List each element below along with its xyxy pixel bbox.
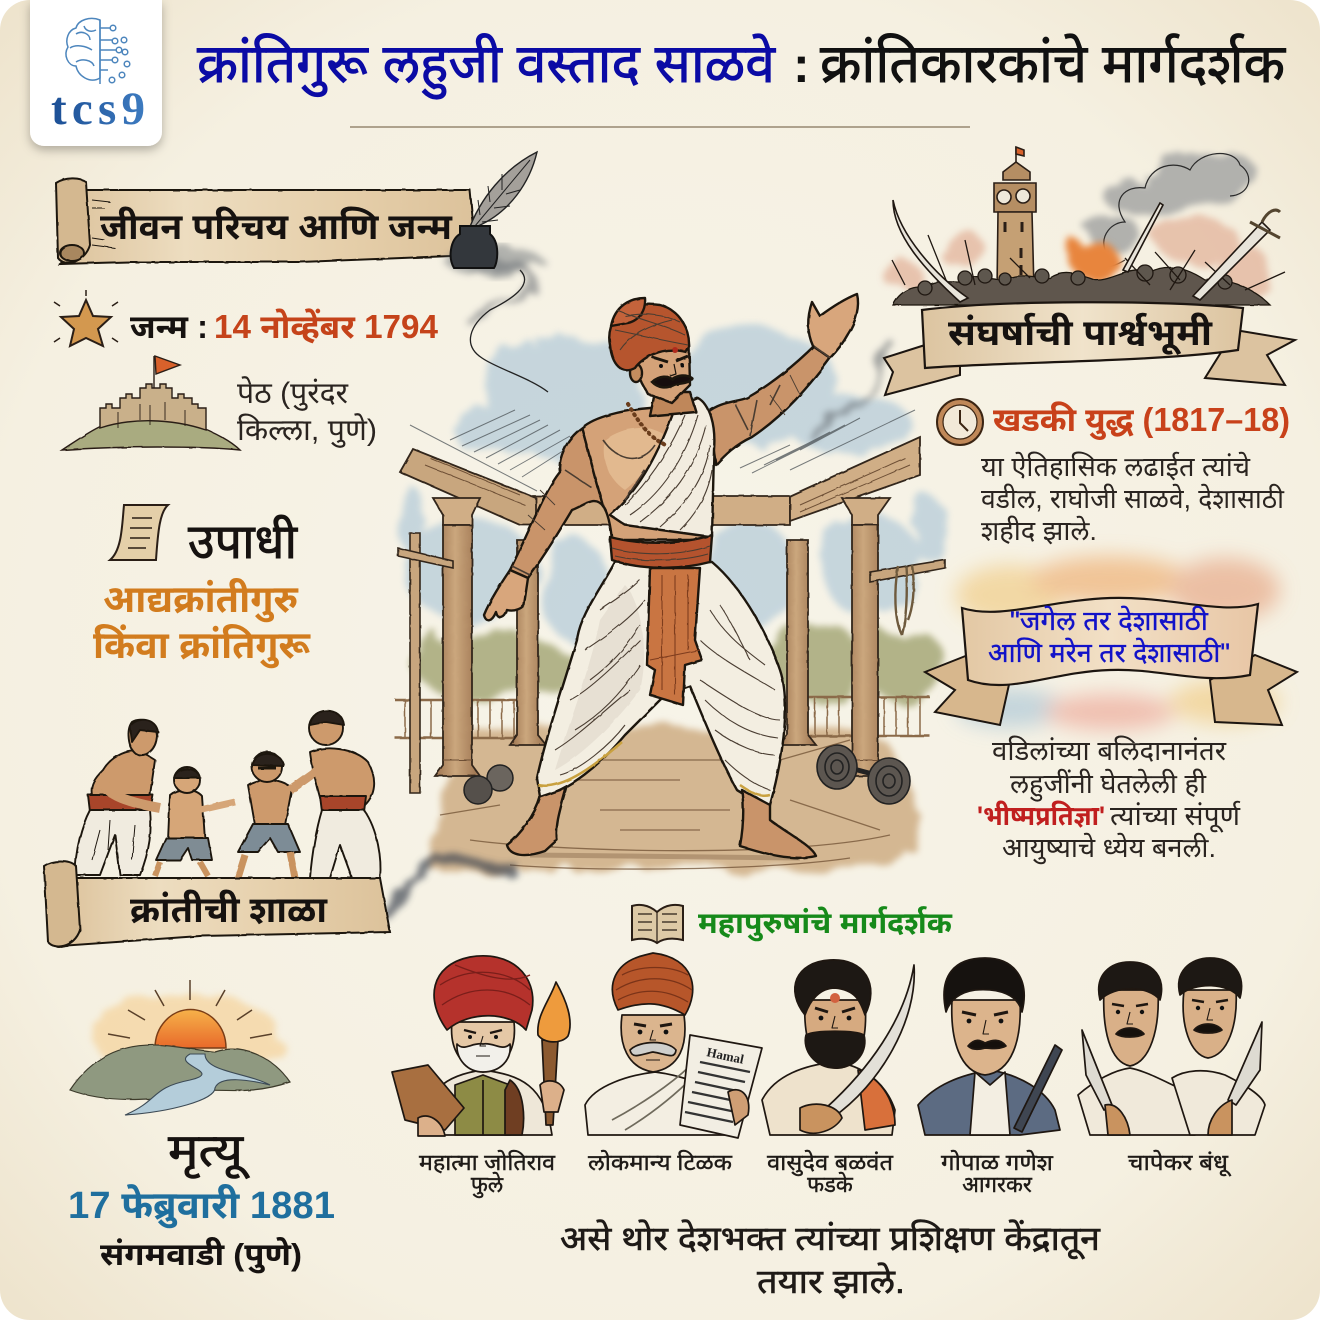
death date: 17 फेब्रुवारी 1881 <box>68 1183 335 1229</box>
illustration: children training <box>75 711 380 878</box>
closing statement <box>560 1219 1101 1301</box>
icon: hill fort <box>62 356 240 450</box>
quote text <box>988 605 1230 668</box>
ground shadow strokes <box>440 740 890 869</box>
closing statement: असे थोर देशभक्त त्यांच्या प्रशिक्षण केंद्रातून <box>560 1219 1101 1259</box>
portrait: Lokmanya Tilak: Hamal <box>705 1044 746 1067</box>
upper garment drape <box>610 398 714 537</box>
scroll heading: life and birth <box>56 178 476 264</box>
logo wordmark: tcs9 <box>51 83 145 135</box>
birth label: जन्म : <box>130 308 208 345</box>
portrait: Lokmanya Tilak <box>585 953 762 1138</box>
Khadki war description: वडील, राघोजी साळवे, देशासाठी <box>981 483 1285 514</box>
Khadki war description <box>981 451 1285 546</box>
portrait: Jyotirao Phule <box>392 956 570 1136</box>
boy right <box>310 748 374 805</box>
title <box>197 33 1287 100</box>
icon: quill feather <box>460 152 537 244</box>
Khadki war description: शहीद झाले. <box>981 515 1097 546</box>
portrait names: आगरकर <box>962 1172 1033 1197</box>
smoke swirl from banner <box>812 345 895 440</box>
middle boy <box>248 780 292 825</box>
pavilion columns and beams <box>400 437 920 776</box>
panel: great men mentored <box>392 905 1265 1199</box>
portrait names: फडके <box>807 1171 854 1197</box>
chest highlight <box>604 428 665 490</box>
smoke cloud <box>1087 154 1253 251</box>
dhoti <box>537 562 785 805</box>
heading: महापुरुषांचे मार्गदर्शक <box>698 905 953 942</box>
dumbbell <box>817 745 910 804</box>
turban knot <box>611 298 645 326</box>
panel: vow quote <box>925 556 1297 865</box>
logo card <box>30 0 162 146</box>
vow description: वडिलांच्या बलिदानानंतर <box>992 736 1227 766</box>
portrait names: महात्मा जोतिराव <box>419 1150 556 1175</box>
heading: death: मृत्यू <box>168 1124 251 1180</box>
portrait names: गोपाळ गणेश <box>941 1149 1054 1175</box>
ribbon: heading body <box>922 302 1243 368</box>
icon: circuit brain <box>66 18 130 84</box>
vow description: लहुजींनी घेतलेली ही <box>1010 768 1207 802</box>
closing statement: तयार झाले. <box>757 1262 905 1301</box>
waist sash <box>610 535 712 568</box>
small boy <box>168 790 205 840</box>
scroll heading: school of revolution <box>44 862 390 946</box>
vow description: त्यांच्या संपूर्ण <box>1110 800 1241 833</box>
title names: आद्यक्रांतीगुरु <box>103 577 299 623</box>
roof hatching <box>410 410 915 491</box>
open hand <box>808 294 858 358</box>
illustration: sunset over river <box>70 980 290 1115</box>
title names <box>93 577 311 669</box>
heading text: क्रांतीची शाळा <box>130 889 328 930</box>
vow description: 'भीष्मप्रतिज्ञा' <box>977 801 1105 831</box>
crowd <box>892 235 1285 305</box>
clock tower <box>994 147 1036 290</box>
watercolor wash <box>955 556 1280 730</box>
watercolor sky <box>400 327 948 640</box>
ribbon tails <box>925 655 1297 725</box>
torso <box>582 400 714 540</box>
ribbon body <box>962 598 1258 685</box>
swords <box>893 200 1280 302</box>
Khadki war heading: खडकी युद्ध (1817–18) <box>993 401 1290 441</box>
quote text: आणि मरेन तर देशासाठी" <box>988 637 1230 668</box>
portrait names: वासुदेव बळवंत <box>767 1149 893 1177</box>
raised arm <box>708 345 830 465</box>
moustache <box>652 375 692 387</box>
icon: open book <box>632 905 683 943</box>
heading: title: उपाधी <box>188 515 299 569</box>
watercolor pink patches <box>885 218 1271 294</box>
portrait: Chapekar brothers <box>1078 958 1265 1135</box>
boy left <box>92 751 155 795</box>
portrait names <box>419 1149 1231 1199</box>
title part one: क्रांतिगुरू लहुजी वस्ताद साळवे <box>197 33 776 100</box>
panel: school of revolution <box>44 711 520 946</box>
portrait names: फुले <box>471 1171 504 1199</box>
quote text: "जगेल तर देशासाठी <box>1010 605 1209 636</box>
illustration: battle scene <box>885 147 1285 305</box>
vow description: आयुष्याचे ध्येय बनली. <box>1002 832 1216 865</box>
icon: star <box>54 290 118 346</box>
fire <box>1068 238 1116 278</box>
death place: संगमवाडी (पुणे) <box>100 1237 302 1274</box>
training poles and rope <box>398 533 945 793</box>
stone weights <box>464 765 513 804</box>
vow description <box>977 736 1241 865</box>
turban <box>609 304 689 370</box>
birth date: 14 नोव्हेंबर 1794 <box>214 308 439 345</box>
ribbon: tails <box>884 330 1295 395</box>
panel: conflict background <box>884 147 1295 546</box>
fence <box>395 697 930 738</box>
title names: किंवा क्रांतिगुरू <box>93 623 311 669</box>
icon: clock <box>937 399 983 445</box>
left foot <box>507 788 566 855</box>
title part two: क्रांतिकारकांचे मार्गदर्शक <box>820 33 1287 94</box>
right foot <box>740 790 816 858</box>
figure <box>484 294 858 858</box>
central illustration: Lahuji Vastad in training ground <box>395 294 950 874</box>
ear <box>630 364 642 382</box>
dhoti shadow <box>555 585 644 770</box>
Khadki war description: या ऐतिहासिक लढाईत त्यांचे <box>981 451 1251 482</box>
title colon: : <box>793 37 810 93</box>
panel: death <box>68 980 335 1274</box>
ink swirl from inkwell <box>470 266 548 392</box>
ink stain <box>445 250 545 274</box>
neck <box>650 392 696 416</box>
left arm <box>510 428 603 578</box>
heading text: संघर्षाची पार्श्वभूमी <box>948 312 1213 355</box>
portrait names: चापेकर बंधू <box>1128 1149 1231 1177</box>
ink swoosh <box>378 858 520 912</box>
eyes, brows and nose <box>652 356 688 362</box>
icon: scroll <box>110 505 168 560</box>
trees <box>412 620 950 700</box>
panel: title honor <box>93 505 311 669</box>
birthplace text: किल्ला, पुणे) <box>237 412 377 448</box>
lowered hand <box>484 570 528 620</box>
portrait names: लोकमान्य टिळक <box>588 1150 733 1175</box>
smoke outline <box>1090 154 1249 267</box>
face <box>636 345 690 403</box>
orange hanging cloth <box>647 568 702 705</box>
icon: ink bottle <box>451 226 497 268</box>
portrait: Vasudev Balwant Phadke <box>762 960 914 1135</box>
panel: life introduction <box>54 152 545 450</box>
portrait: Gopal Ganesh Agarkar <box>918 958 1062 1135</box>
fold lines <box>512 310 830 796</box>
birthplace text: पेठ (पुरंदर <box>237 375 349 411</box>
heading text: जीवन परिचय आणि जन्म <box>100 206 453 247</box>
birthplace text <box>237 375 377 448</box>
ground <box>430 728 918 874</box>
